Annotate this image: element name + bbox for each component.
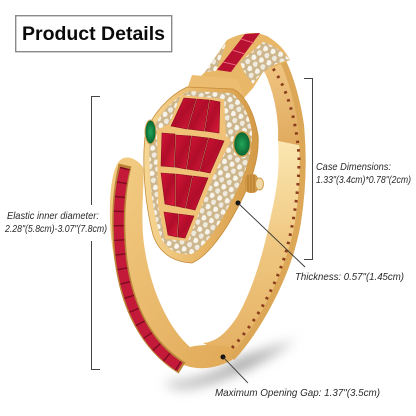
label: elastic inner diameter: 2.28"(5.8cm)-3.07"(7.8cm) [4,223,107,235]
shoulder of the snake [195,33,290,98]
label: elastic inner diameter: Elastic inner diameter: [7,210,99,222]
emerald left [145,120,156,144]
shoulder diamonds left [205,41,227,72]
label: elastic inner diameter [4,210,107,235]
bracket: case dimensions [304,78,312,260]
ruby row 4 [164,212,194,238]
ruby row 1 [171,98,220,133]
diamond pave [149,91,252,254]
left arm rubies [119,168,180,367]
label: opening gap: Maximum Opening Gap: 1.37"(3.5cm) [215,387,380,399]
left arm and bottom curve [110,157,238,368]
label: case dimensions [316,161,411,186]
ruby separators [119,168,180,367]
snake head watch [144,87,264,263]
title box: Product Details [22,23,165,45]
head body [144,87,258,263]
right arm inner surface, lower [203,141,303,358]
ruby row 3 [161,173,208,210]
shoulder ruby separators [223,39,254,65]
leader: thickness [236,200,305,267]
shoulder diamonds right [240,42,290,84]
left arm rubies setting [119,165,182,368]
edge perforations [228,62,299,352]
shoulder rubies [217,33,260,72]
leader: opening gap [220,354,248,383]
label: case dimensions: Case Dimensions: [316,161,391,173]
title box [16,16,172,52]
right arm perforated edge [232,38,303,358]
right arm inner surface, upper [258,50,302,146]
shoulder gold [195,33,290,98]
crown [245,174,264,193]
ruby row 2 [161,133,224,173]
emerald right [234,132,250,156]
label: thickness: Thickness: 0.57"(1.45cm) [295,271,404,283]
ruby shield setting [157,95,231,241]
bracket: inner diameter [92,96,100,370]
drop shadow [165,340,296,388]
collar [186,75,244,96]
bangle [110,38,303,368]
